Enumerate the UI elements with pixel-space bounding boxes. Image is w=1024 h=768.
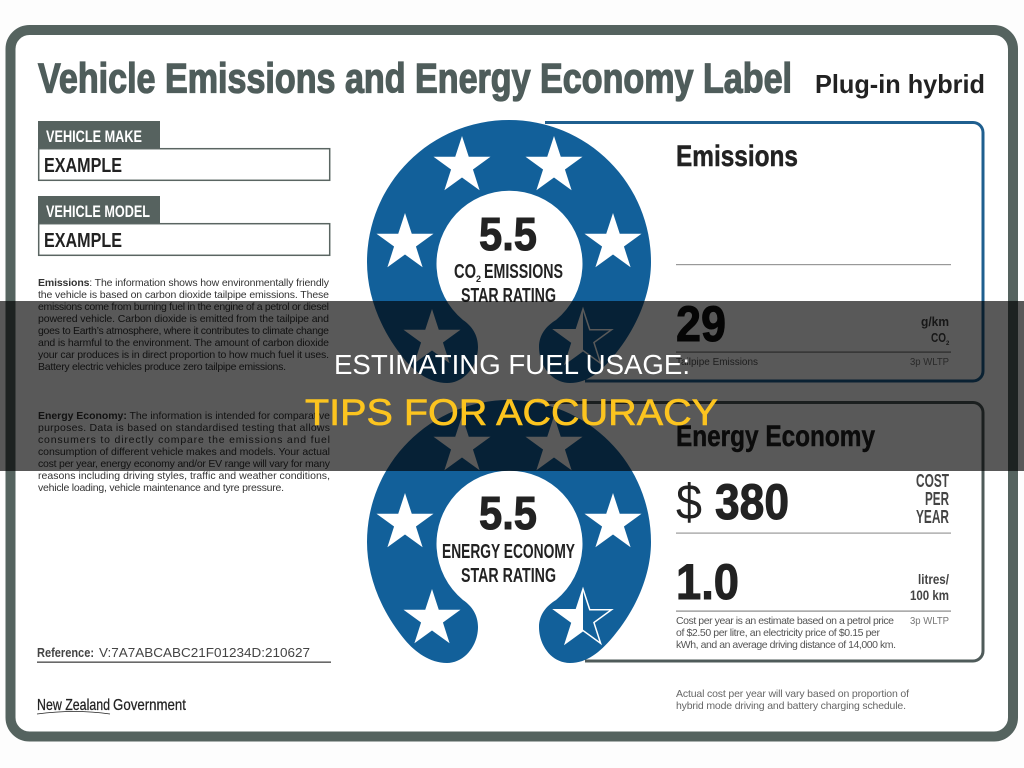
text block: emissions explanation: the vehicle is based on carbon dioxide tailpipe emissions. These — [38, 289, 329, 301]
emissions rating caption: EMISSIONS — [484, 261, 563, 283]
cost per year unit: PER — [925, 489, 949, 509]
field: vehicle make: EXAMPLE — [44, 155, 122, 177]
logo: New Zealand Government — [37, 697, 186, 714]
emissions unit: g/km — [921, 314, 949, 329]
note: actual cost — [676, 688, 909, 712]
field: vehicle model: VEHICLE MODEL — [46, 202, 150, 221]
cost footnote: Cost per year is an estimate based on a petrol price — [676, 615, 894, 627]
text block: energy economy explanation — [38, 410, 331, 494]
field: vehicle model — [38, 196, 330, 255]
text block: energy economy explanation: consumers to directly compare the emissions and fuel — [38, 434, 330, 446]
fuel use unit: litres/ — [918, 571, 949, 587]
note: actual cost: hybrid mode driving and battery charging schedule. — [676, 700, 906, 712]
text block: emissions explanation: Emissions: The information shows how environmentally friendly — [38, 277, 330, 289]
cost footnote: kWh, and an average driving distance of 14,000 km. — [676, 639, 896, 651]
field: vehicle make: VEHICLE MAKE — [46, 127, 142, 146]
cost per year value — [676, 474, 789, 530]
test standard: 3p WLTP — [910, 357, 949, 368]
fuel use unit — [910, 571, 949, 603]
reference number: V:7A7ABCABC21F01234D:210627 — [99, 645, 310, 660]
emissions rating caption: STAR RATING — [461, 285, 556, 307]
text block: energy economy explanation: Energy Economy: The information is intended for comparative — [38, 410, 330, 422]
note: actual cost: Actual cost per year will vary based on proportion of — [676, 688, 909, 700]
reference number — [37, 645, 331, 663]
emissions unit: CO — [931, 330, 946, 345]
text block: emissions explanation — [38, 277, 330, 373]
test standard: 3p WLTP — [910, 616, 949, 627]
logo: New Zealand Government: Government — [113, 697, 186, 714]
tailpipe emissions caption: Tailpipe Emissions — [676, 357, 758, 368]
reference number: Reference: — [37, 645, 94, 660]
text block: emissions explanation: emissions come from burning fuel in the engine of a petrol or diesel — [38, 301, 329, 313]
text block: emissions explanation: Battery electric vehicles produce zero tailpipe emissions. — [38, 361, 286, 373]
logo: New Zealand Government: New Zealand — [37, 697, 110, 714]
emissions star rating badge — [367, 120, 651, 383]
field: vehicle make — [38, 121, 330, 180]
emissions heading: Emissions — [676, 140, 798, 173]
fuel use unit: 100 km — [910, 587, 949, 603]
cost per year unit — [916, 471, 949, 527]
text block: energy economy explanation: consumption of different vehicle makes and models. Your actual — [38, 446, 330, 458]
emissions rating value: 5.5 — [479, 208, 537, 260]
cost footnote — [676, 615, 896, 651]
emissions unit — [921, 314, 950, 347]
text block: energy economy explanation: reasons including driving styles, traffic and weather conditions, — [38, 470, 330, 482]
text block: energy economy explanation: vehicle loading, vehicle maintenance and tyre pressure. — [38, 482, 284, 494]
panel: emissions — [545, 122, 983, 381]
cost per year unit: COST — [916, 471, 949, 491]
energy rating value: 5.5 — [479, 487, 537, 539]
energy economy heading: Energy Economy — [676, 420, 875, 453]
emissions rating caption — [454, 261, 563, 307]
vehicle type: Plug-in hybrid — [815, 69, 985, 99]
text block: emissions explanation: goes to Earth’s atmosphere, where it contributes to climate change — [38, 325, 329, 337]
text block: emissions explanation: and is harmful to the environment. The amount of carbon dioxide — [38, 337, 329, 349]
energy rating caption: ENERGY ECONOMY — [442, 541, 575, 563]
banner subtitle: TIPS FOR ACCURACY — [305, 392, 718, 433]
text block: energy economy explanation: purposes. Data is based on standardised testing that allows — [38, 422, 330, 434]
cost footnote: of $2.50 per litre, an electricity price of $0.15 per — [676, 627, 880, 639]
emissions value: 29 — [676, 296, 726, 352]
emissions rating caption: 2 — [476, 274, 481, 284]
cost per year value: 380 — [715, 474, 789, 530]
banner overlay — [0, 301, 1024, 471]
cost per year unit: YEAR — [916, 507, 949, 527]
panel: energy economy — [545, 402, 983, 661]
field: vehicle model: EXAMPLE — [44, 230, 122, 252]
energy economy star rating badge — [367, 400, 651, 663]
emissions unit: 2 — [946, 341, 950, 347]
banner title: ESTIMATING FUEL USAGE: — [334, 349, 690, 380]
energy rating caption — [442, 541, 575, 587]
text block: emissions explanation: your car produces is in direct proportion to how much fuel it uses. — [38, 349, 329, 361]
fuel use value: 1.0 — [676, 554, 739, 610]
energy rating caption: STAR RATING — [461, 565, 556, 587]
cost per year value: $ — [676, 474, 702, 530]
emissions rating caption: CO — [454, 261, 476, 283]
text block: emissions explanation: powered vehicle. Carbon dioxide is emitted from the tailpipe and — [38, 313, 329, 325]
title: Vehicle Emissions and Energy Economy Label — [38, 54, 792, 102]
text block: energy economy explanation: cost per year, energy economy and/or EV range will vary for many — [38, 458, 331, 470]
